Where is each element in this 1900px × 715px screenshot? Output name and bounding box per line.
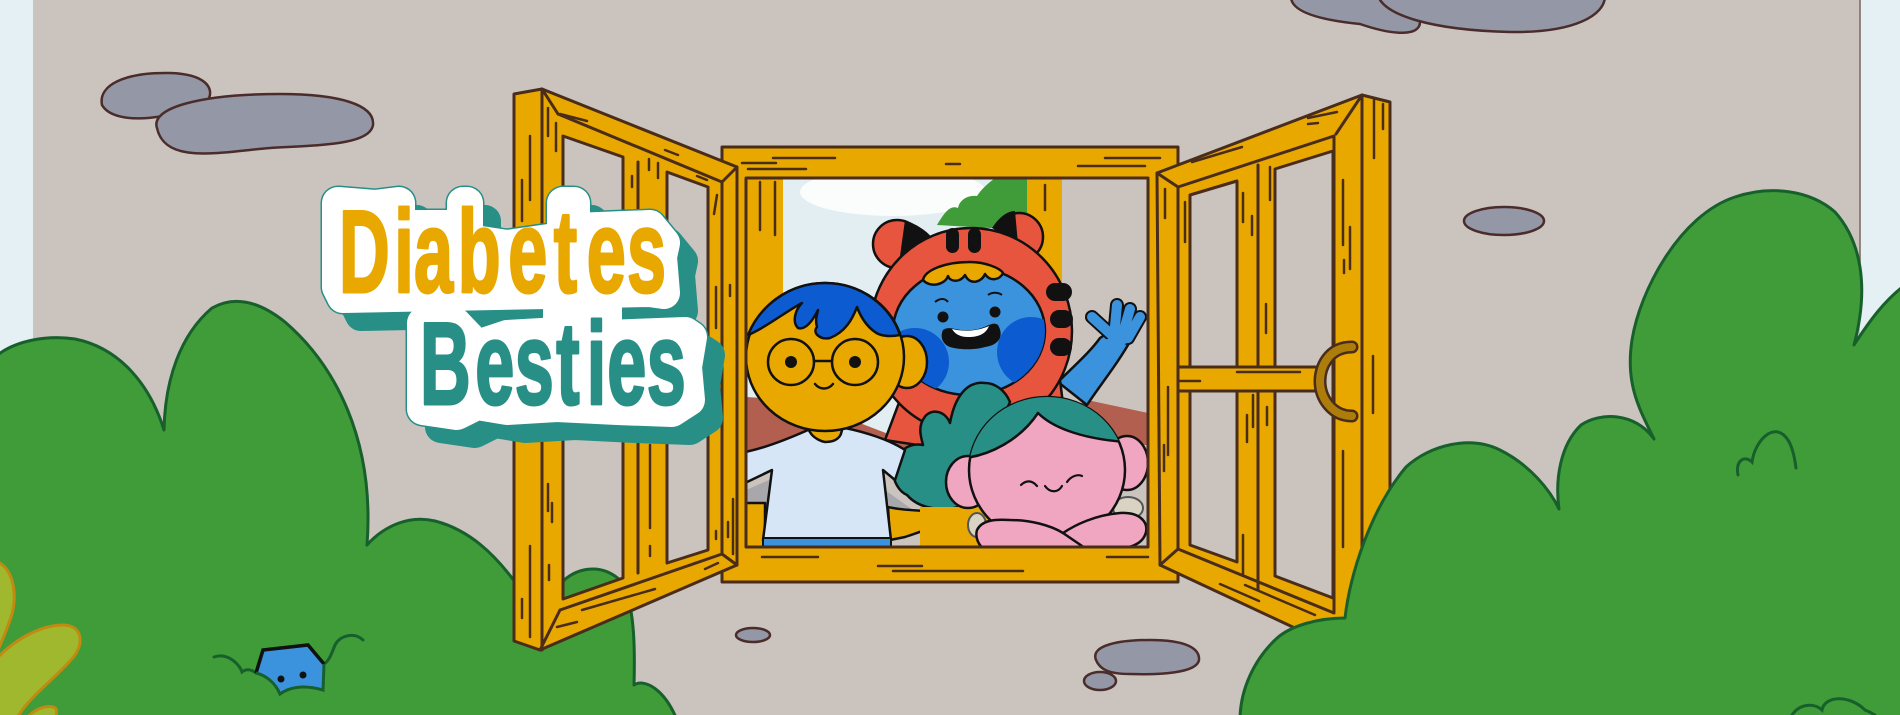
logo word: Besties: Besties (420, 300, 686, 429)
lower yellow shape (920, 507, 988, 549)
neck (808, 428, 842, 442)
curtain and frame fold detail (760, 182, 1045, 235)
logo shadow (356, 221, 709, 432)
mouth (942, 324, 1001, 349)
boy arms (748, 502, 920, 546)
bush: right (1240, 191, 1900, 715)
tiger face (893, 267, 1045, 395)
inner ears (900, 211, 1018, 256)
cross rail (1178, 367, 1320, 391)
hood (870, 228, 1072, 434)
cross rail grain (1178, 372, 1300, 381)
hair (748, 283, 900, 338)
window shutter: right (1157, 95, 1390, 680)
roof right (1081, 401, 1146, 445)
wall right edge (1859, 0, 1861, 300)
right curtain (1027, 180, 1062, 283)
girl left ear (946, 456, 990, 508)
right shutter structure lines (1157, 95, 1362, 650)
bush tuft: peeking creature left (214, 656, 256, 673)
character: boy with glasses (745, 283, 988, 549)
girl head (969, 397, 1125, 543)
girl right ear (1106, 436, 1148, 490)
lower wall through window (1112, 445, 1146, 546)
teeth (952, 326, 989, 337)
hood body (885, 380, 1065, 450)
girl crossed arms (976, 513, 1146, 550)
distant tree (937, 178, 1027, 230)
hand fingers fill (1092, 305, 1140, 345)
eyes (938, 312, 948, 322)
cloud (800, 180, 984, 216)
character: tiger hood friend (870, 211, 1140, 450)
arm crossing line (1063, 533, 1085, 548)
left lower clutter (748, 472, 922, 546)
wall stone: right (1464, 207, 1544, 235)
frame grain (742, 158, 1160, 571)
bandages (968, 497, 1143, 537)
waistband (763, 538, 891, 547)
wall stones: upper left (102, 73, 373, 153)
ear (898, 334, 928, 390)
window frame: centre (722, 147, 1178, 582)
logo plate outline (338, 203, 691, 414)
left shutter grain (522, 108, 733, 637)
left shutter structure lines (540, 89, 737, 650)
roof left (748, 397, 909, 450)
bush: left (0, 301, 677, 715)
window clutter (748, 480, 912, 509)
head (746, 283, 904, 431)
view through window (745, 168, 1148, 550)
logo word: Diabetes: Diabetes (339, 188, 666, 317)
logo: Diabetes Besties (338, 188, 709, 432)
waving arm (1061, 335, 1130, 406)
leaves: bottom left plant (0, 562, 80, 715)
fringe (923, 262, 1003, 285)
handle (1320, 347, 1352, 416)
hood ear right (995, 213, 1043, 261)
neighbouring wall (1062, 178, 1148, 418)
shirt (745, 428, 905, 540)
cheeks (900, 317, 1045, 388)
wall stones: below window (736, 628, 1199, 690)
bush tuft: right upper (1737, 432, 1796, 475)
character: girl with teal hair (946, 390, 1148, 550)
hood ear left (872, 218, 910, 268)
left curtain (748, 180, 783, 338)
bush tuft: right lower (1792, 699, 1875, 715)
boy smile (815, 384, 833, 388)
brows (935, 293, 1002, 302)
girl hair (960, 390, 1130, 458)
wall stones: upper right (1291, 0, 1605, 33)
logo plate (338, 203, 691, 414)
bush tuft: peeking creature right (324, 635, 363, 664)
window shutter: left (514, 89, 737, 650)
peeking blue creature (256, 645, 324, 694)
character: girl bun behind (893, 383, 1010, 509)
girl face (1021, 475, 1082, 491)
sky through window (748, 180, 994, 520)
hand fingers outline (1092, 305, 1140, 338)
boy eyes (785, 356, 797, 368)
right shutter grain (1164, 100, 1383, 615)
glasses (768, 339, 878, 385)
hood stripes (946, 228, 1073, 356)
